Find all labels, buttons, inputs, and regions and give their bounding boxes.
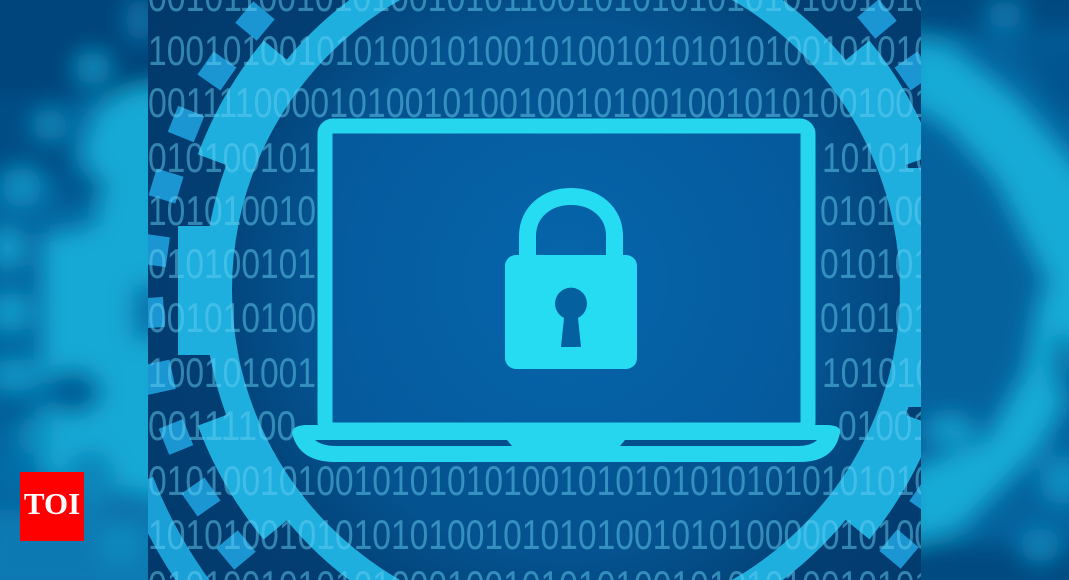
binary digit rows: 010100	[820, 187, 932, 234]
binary digit rows: 101010	[822, 349, 934, 396]
padlock keyhole	[555, 288, 587, 347]
binary digit rows: 010100101	[148, 134, 316, 181]
ring: outer circuit arcs	[140, 0, 914, 580]
rotated data squares	[131, 0, 943, 570]
laptop keyboard slot left	[315, 440, 512, 446]
binary digit rows: 101010	[822, 134, 934, 181]
padlock shackle	[528, 196, 614, 262]
binary digit rows	[148, 0, 934, 580]
panel background	[148, 0, 921, 580]
blurred left side panel	[0, 0, 148, 580]
binary digit rows: 010100101	[148, 240, 316, 287]
binary digit rows: 100101001	[148, 349, 316, 396]
padlock body	[505, 255, 637, 369]
blurred right side panel	[921, 0, 1069, 580]
logo: TOI: TOI	[24, 486, 80, 521]
binary digit rows: 101010010	[148, 187, 316, 234]
logo: TOI	[20, 472, 84, 541]
binary digit rows: 01001	[838, 402, 931, 449]
ring: interior disc	[232, 0, 900, 580]
ring: side blocks	[178, 168, 930, 407]
binary digit rows: 010101	[820, 294, 932, 341]
binary digit rows: 001010100	[148, 294, 316, 341]
laptop base	[292, 425, 840, 462]
icon: padlock	[505, 196, 637, 369]
laptop screen	[325, 126, 808, 430]
main image panel	[131, 0, 943, 580]
binary digit rows: 010101	[820, 240, 932, 287]
icon: laptop	[292, 126, 840, 462]
binary digit rows: 00111100	[148, 402, 296, 449]
laptop keyboard slot right	[620, 440, 817, 446]
